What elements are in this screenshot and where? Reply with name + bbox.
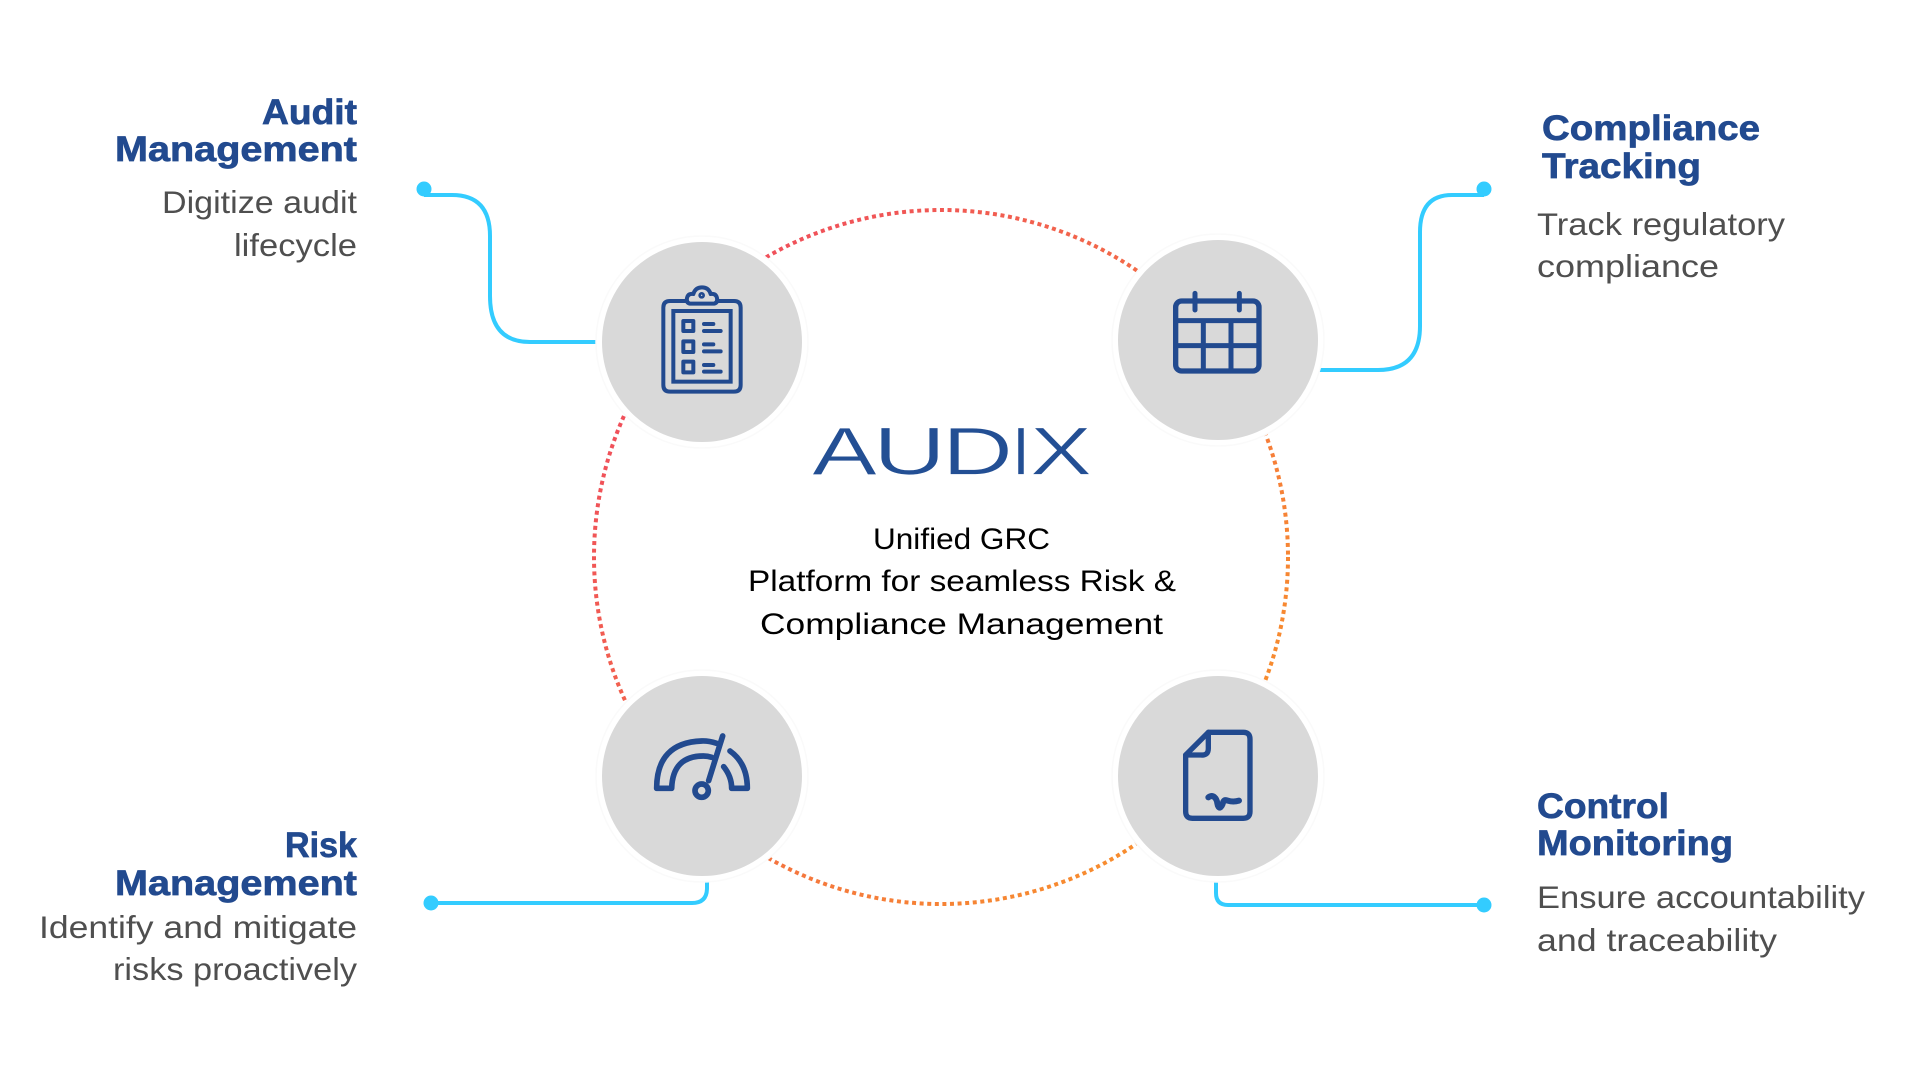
- logo: AUDIX: U: [873, 414, 946, 490]
- icon: signed document: [1112, 670, 1324, 882]
- panel: control monitoring: [1112, 670, 1865, 958]
- panel: compliance tracking: [1112, 109, 1785, 446]
- text: platform tagline: Unified GRC: [873, 523, 1050, 556]
- heading: risk management: Risk: [285, 826, 358, 865]
- heading: control monitoring: Monitoring: [1537, 824, 1733, 863]
- logo: AUDIX: A: [812, 414, 878, 490]
- dotted ring: [594, 210, 1288, 904]
- connector: compliance: [1319, 182, 1492, 370]
- logo: AUDIX: D: [942, 414, 1013, 490]
- icon: clipboard: [596, 236, 808, 448]
- heading: audit management: [115, 93, 357, 169]
- connector: risk: [424, 882, 707, 910]
- logo: AUDIX: X: [1030, 414, 1092, 490]
- text: platform tagline: [748, 523, 1176, 641]
- text: audit description: lifecycle: [234, 227, 357, 263]
- heading: audit management: Management: [115, 130, 357, 169]
- text: platform tagline: Compliance Management: [760, 608, 1164, 641]
- text: risk description: [39, 909, 357, 987]
- panel: risk management: [39, 670, 808, 987]
- text: audit description: Digitize audit: [162, 184, 357, 220]
- text: risk description: risks proactively: [113, 951, 357, 987]
- text: control description: [1537, 879, 1865, 958]
- heading: compliance tracking: Tracking: [1542, 147, 1701, 186]
- heading: risk management: Management: [115, 864, 357, 903]
- panel: audit management: [115, 93, 808, 448]
- logo: AUDIX: [812, 414, 1092, 490]
- text: control description: Ensure accountability: [1537, 879, 1865, 915]
- logo: AUDIX: I: [1012, 414, 1030, 490]
- connector: control: [1216, 882, 1492, 912]
- heading: audit management: Audit: [262, 93, 357, 132]
- text: platform tagline: Platform for seamless Risk &: [748, 565, 1176, 598]
- heading: risk management: [115, 826, 358, 903]
- text: audit description: [162, 184, 357, 263]
- text: risk description: Identify and mitigate: [39, 909, 357, 945]
- text: compliance description: Track regulatory: [1537, 206, 1785, 242]
- heading: control monitoring: [1537, 787, 1733, 863]
- heading: compliance tracking: [1542, 109, 1760, 186]
- text: compliance description: compliance: [1537, 248, 1719, 284]
- heading: control monitoring: Control: [1537, 787, 1669, 826]
- connector: audit: [416, 182, 596, 342]
- heading: compliance tracking: Compliance: [1542, 109, 1760, 148]
- text: compliance description: [1537, 206, 1785, 284]
- icon: gauge: [596, 670, 808, 882]
- text: control description: and traceability: [1537, 922, 1777, 958]
- icon: calendar: [1112, 234, 1324, 446]
